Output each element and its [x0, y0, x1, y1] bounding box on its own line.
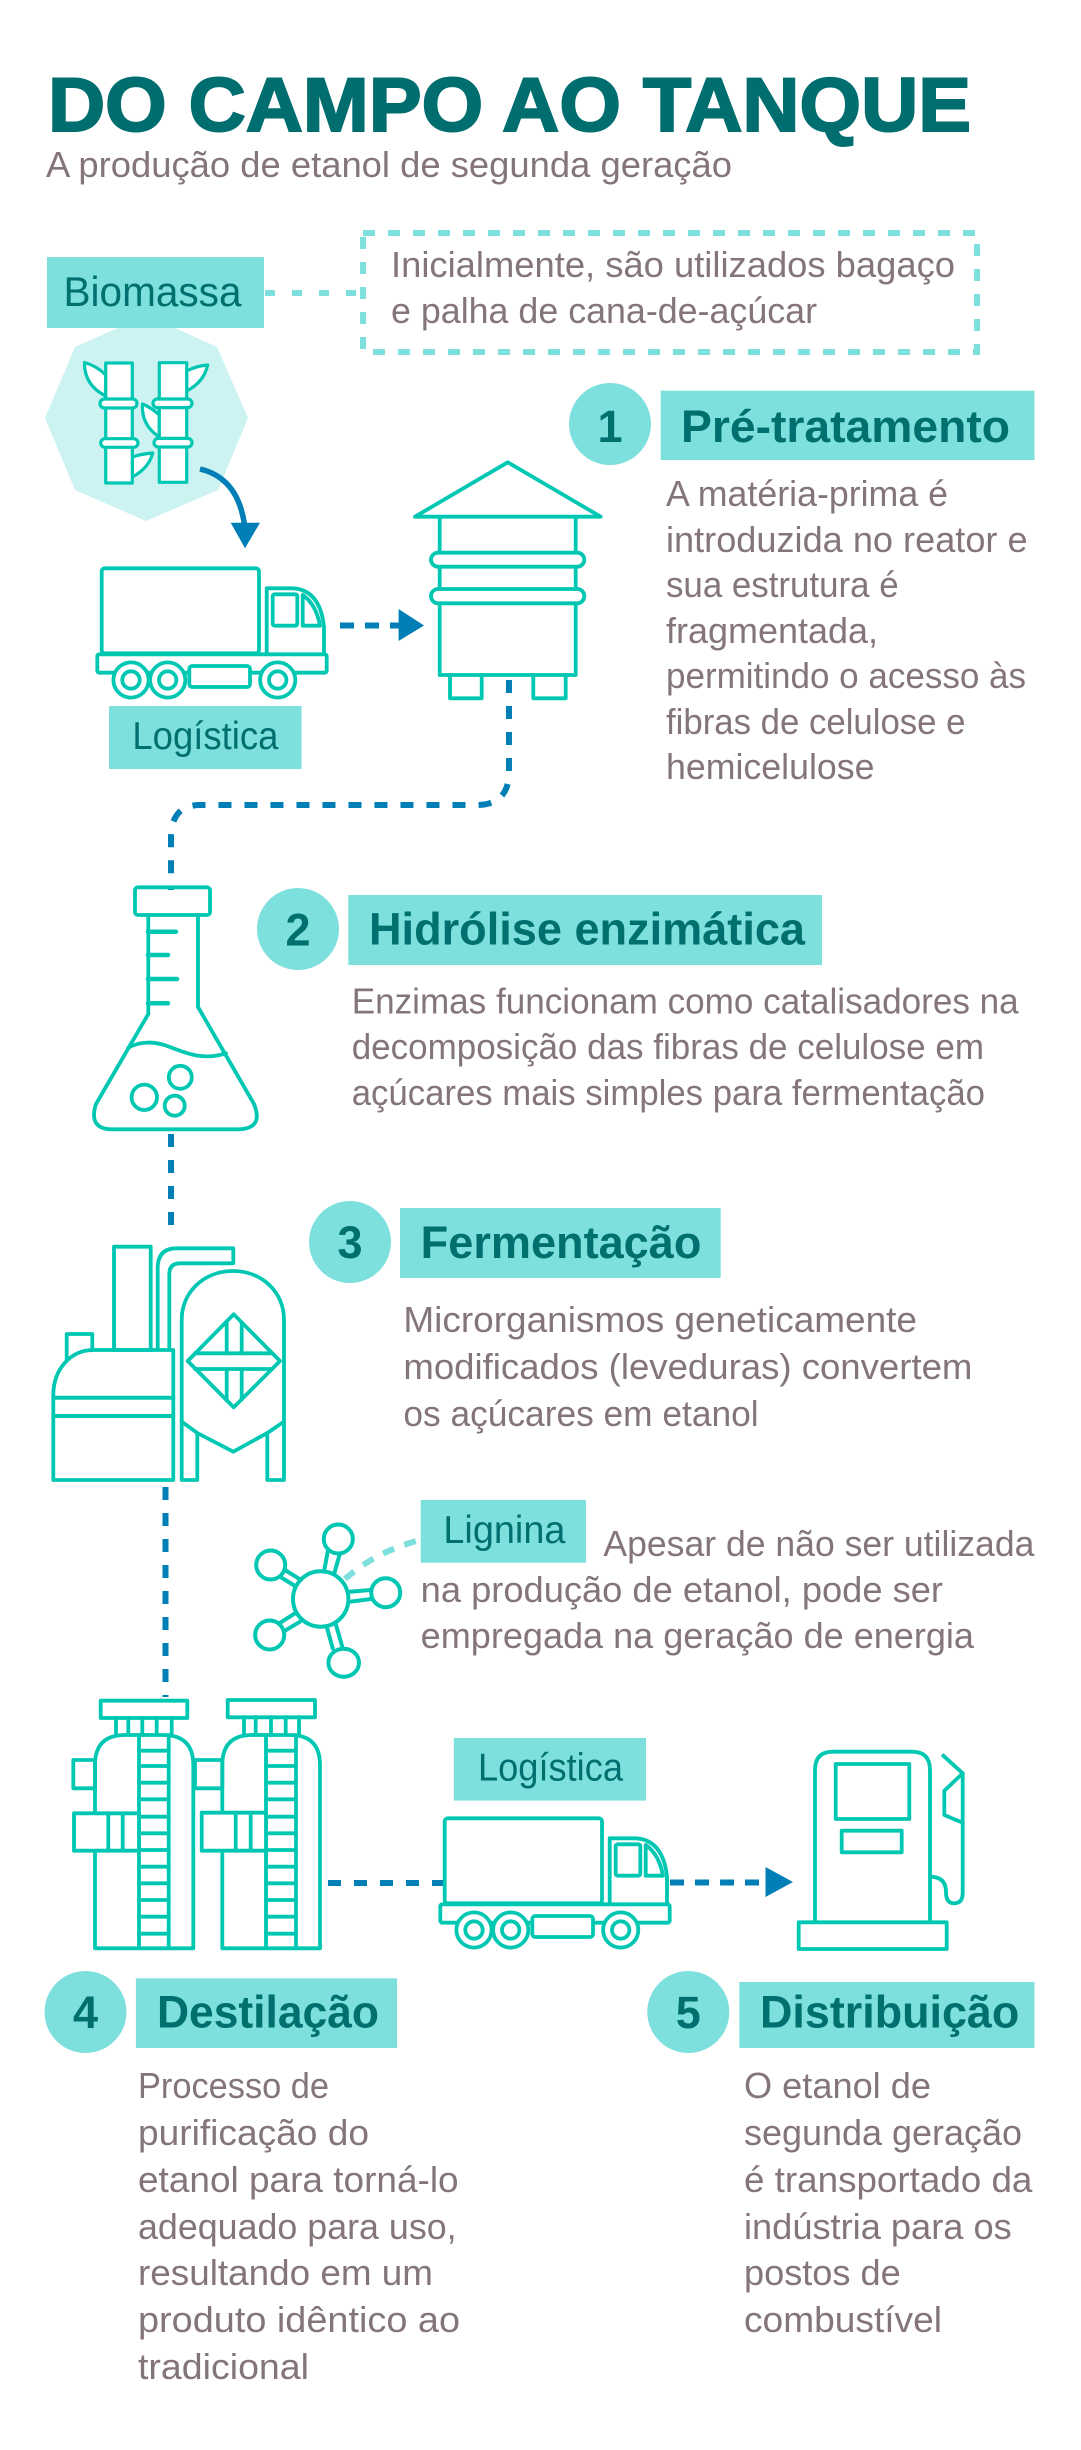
step 1: pré-tratamento: [569, 383, 1034, 787]
icon: sugarcane on octagon: [45, 327, 248, 521]
step 1: pré-tratamento: 1: [597, 401, 623, 452]
note: lignina: Apesar de não ser utilizada: [603, 1523, 1035, 1564]
icon: distillation columns: [73, 1700, 320, 1948]
arrow: truck to pump: [670, 1867, 793, 1897]
step 5: distribuição: [647, 1971, 1034, 2340]
title: DO CAMPO AO TANQUE: [48, 63, 971, 148]
step 3: fermentação: Microrganismos geneticamente: [403, 1299, 917, 1340]
arrow: truck to reactor: [340, 609, 424, 641]
step 1: pré-tratamento: fibras de celulose e: [666, 701, 966, 742]
step 3: fermentação: os açúcares em etanol: [403, 1393, 759, 1434]
step 5: distribuição: postos de: [744, 2252, 901, 2293]
step 1: pré-tratamento: A matéria-prima é: [666, 473, 948, 514]
step 1: pré-tratamento: introduzida no reator e: [666, 519, 1028, 560]
note: lignina: Lignina: [443, 1509, 566, 1552]
label: logística 2: Logística: [478, 1746, 623, 1790]
step 4: destilação: [44, 1971, 460, 2387]
arrow: distillation to truck: [328, 1880, 444, 1886]
icon: fermenter: [53, 1247, 284, 1480]
icon: lignin molecule: [255, 1524, 400, 1677]
step 2: hidrólise enzimática: açúcares mais simples para fermentação: [352, 1072, 985, 1113]
label: biomassa: Biomassa: [64, 268, 242, 315]
step 4: destilação: purificação do: [138, 2112, 369, 2153]
label: biomassa: [47, 257, 264, 328]
step 5: distribuição: é transportado da: [744, 2159, 1033, 2200]
callout: biomass note: [363, 233, 977, 352]
step 1: pré-tratamento: hemicelulose: [666, 746, 874, 787]
step 5: distribuição: O etanol de: [744, 2065, 931, 2106]
note: lignina: na produção de etanol, pode ser: [421, 1569, 943, 1610]
step 1: pré-tratamento: sua estrutura é: [666, 564, 899, 605]
step 5: distribuição: combustível: [744, 2299, 942, 2340]
icon: truck 2: [440, 1818, 670, 1948]
callout: biomass note: Inicialmente, são utilizados bagaço: [391, 244, 955, 285]
label: logística 2: [454, 1738, 646, 1801]
connector: biomassa to note: [265, 290, 358, 296]
arrow: biomass to truck: [200, 469, 260, 548]
subtitle: A produção de etanol de segunda geração: [46, 144, 732, 185]
step 2: hidrólise enzimática: 2: [285, 904, 311, 956]
arrow: reactor to flask: [171, 680, 509, 890]
arrow: flask to fermenter: [168, 1134, 174, 1238]
step 2: hidrólise enzimática: Enzimas funcionam como catalisadores na: [352, 980, 1020, 1022]
connector: lignina to molecule: [345, 1540, 420, 1579]
step 3: fermentação: [309, 1201, 972, 1434]
step 3: fermentação: modificados (leveduras) convertem: [403, 1346, 972, 1387]
step 4: destilação: etanol para torná-lo: [138, 2159, 459, 2200]
step 1: pré-tratamento: permitindo o acesso às: [666, 655, 1026, 696]
step 5: distribuição: segunda geração: [744, 2112, 1022, 2153]
step 3: fermentação: Fermentação: [421, 1217, 701, 1268]
icon: reactor: [415, 462, 601, 698]
step 2: hidrólise enzimática: Hidrólise enzimática: [369, 904, 806, 954]
note: lignina: [421, 1500, 1035, 1656]
step 4: destilação: adequado para uso,: [138, 2206, 457, 2247]
step 4: destilação: Processo de: [138, 2065, 329, 2106]
label: logística 1: Logística: [132, 715, 279, 758]
note: lignina: empregada na geração de energia: [421, 1615, 975, 1656]
step 4: destilação: tradicional: [138, 2346, 309, 2387]
step 4: destilação: 4: [73, 1987, 98, 2038]
icon: fuel pump: [799, 1752, 963, 1949]
label: logística 1: [109, 706, 302, 769]
step 4: destilação: resultando em um: [138, 2252, 433, 2293]
step 1: pré-tratamento: Pré-tratamento: [681, 401, 1010, 452]
step 2: hidrólise enzimática: decomposição das fibras de celulose em: [352, 1026, 984, 1067]
icon: truck: [97, 568, 327, 698]
icon: flask: [94, 887, 257, 1129]
callout: biomass note: e palha de cana-de-açúcar: [391, 290, 817, 331]
step 5: distribuição: 5: [676, 1987, 701, 2038]
step 1: pré-tratamento: fragmentada,: [666, 610, 878, 651]
step 5: distribuição: Distribuição: [760, 1986, 1019, 2037]
step 3: fermentação: 3: [337, 1217, 363, 1268]
arrow: fermenter to distillation: [162, 1487, 168, 1697]
step 4: destilação: Destilação: [157, 1986, 379, 2037]
step 2: hidrólise enzimática: [257, 888, 1020, 1113]
step 4: destilação: produto idêntico ao: [138, 2299, 460, 2340]
step 5: distribuição: indústria para os: [744, 2206, 1012, 2247]
